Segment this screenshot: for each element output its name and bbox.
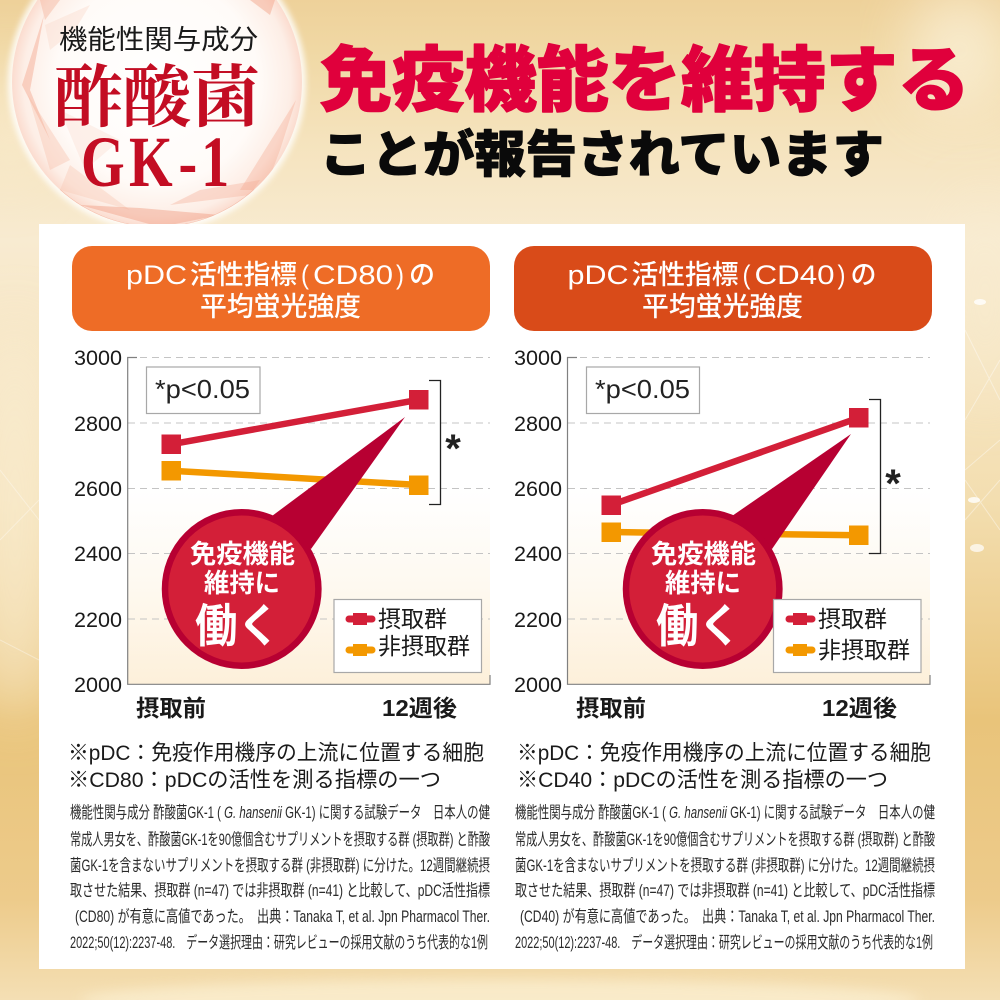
callout bubble: 維持に [665,568,741,598]
callout bubble: 免疫機能 [190,539,295,569]
header: CD40: pDC [568,260,628,290]
text: GK-1: GK-1 [81,121,229,202]
significance bracket: * [885,462,901,506]
panel: left CD80 [68,246,490,952]
legend: 摂取群 [818,606,887,632]
chart: CD80 line chart [74,347,490,721]
series: intake [162,390,428,454]
chart: CD80 line chart: 2600 [74,478,122,501]
chart: CD40 line chart: 2800 [514,413,562,436]
footnote: study details: 機能性関与成分 酢酸菌GK-1 ( G. hansenii GK-1) に関する試験データ 日本人の健 [70,802,490,822]
chart: CD40 line chart: 摂取前 [576,695,646,721]
notes: definitions: ※CD80：pDCの活性を測る指標の一つ [68,768,441,792]
header: CD80: CD80 [313,260,393,290]
header: CD80: ) [396,260,404,290]
header: CD40: 平均蛍光強度 [642,292,803,322]
significance bracket [869,400,901,554]
header: CD80: 平均蛍光強度 [200,292,361,322]
chart: CD80 line chart: 2000 [74,674,122,697]
icon: crystal globe [8,0,306,231]
callout bubble: 働く [195,600,280,652]
callout bubble: 維持に [204,568,280,598]
series: non-intake [602,522,868,545]
p-value box [586,367,700,414]
footnote: study details: 常成人男女を、酢酸菌GK-1を90億個含むサプリメントを摂取する群 (摂取群) と酢酸 [70,830,490,849]
callout bubble: 免疫機能 [651,539,756,569]
callout bubble [165,417,405,666]
chart: CD40 line chart: 2200 [514,609,562,632]
callout bubble: 働く [656,600,741,652]
legend: 非摂取群 [818,637,910,663]
legend [774,600,921,672]
header: CD40: 活性指標 [632,260,738,290]
chart: CD80 line chart: 摂取前 [136,695,206,721]
footnote: study details [70,802,490,952]
chart: CD40 line chart: 2600 [514,478,562,501]
footnote: study details: 2022;50(12):2237-48. データ選択理由：研究レビューの採用文献のうち代表的な1例 [70,932,488,952]
header: CD80 [72,246,490,331]
notes: definitions: ※pDC：免疫作用機序の上流に位置する細胞 [517,741,931,765]
footnote: study details: (CD80) が有意に高値であった。 出典：Tanaka T, et al. Jpn Pharmacol Ther. [75,907,490,926]
significance bracket [429,380,461,504]
significance bracket: * [445,427,461,471]
header: CD40: ( [742,260,750,290]
notes: definitions [68,741,484,792]
chart: CD40 line chart: 2400 [514,543,562,566]
chart: CD80 line chart: 3000 [74,347,122,370]
footnote: study details [515,802,935,952]
header: CD40: ) [838,260,846,290]
chart: CD80 line chart: 2200 [74,609,122,632]
series: intake [602,408,868,515]
header: CD40 [514,246,932,331]
header: CD40: CD40 [754,260,834,290]
chart: CD80 line chart: 2400 [74,543,122,566]
chart: CD40 line chart: 3000 [514,347,562,370]
header: CD80: ( [301,260,309,290]
chart: CD40 line chart: 2000 [514,674,562,697]
legend: 摂取群 [378,606,447,632]
panel: white content card [39,224,965,969]
p-value box: *p<0.05 [155,374,250,404]
chart: CD80 line chart: 12週後 [382,695,457,721]
panel: right CD40 [514,246,935,952]
callout bubble [626,434,851,666]
notes: definitions: ※pDC：免疫作用機序の上流に位置する細胞 [68,741,484,765]
text: 機能性関与成分: 機能性関与成分 [59,25,258,55]
chart: CD40 line chart [514,347,930,721]
series: non-intake [162,461,428,495]
title: 免疫機能を維持する: 免疫機能を維持する [320,42,970,121]
subtitle: ことが報告されています: ことが報告されています [320,127,884,183]
legend: 非摂取群 [378,633,470,659]
footnote: study details: 取させた結果、摂取群 (n=47) では非摂取群 (n=41) と比較して、pDC活性指標 [70,881,490,900]
footnote: study details: 菌GK-1を含まないサプリメントを摂取する群 (非摂取群) に分けた。12週間継続摂 [70,856,490,875]
text: 酢酸菌: 酢酸菌 [54,44,260,141]
header: CD80: 活性指標 [190,260,297,290]
header: CD80: pDC [126,260,187,290]
p-value box: *p<0.05 [595,374,690,404]
notes: definitions [517,741,931,792]
p-value box [146,367,260,414]
legend [334,600,482,672]
chart: CD40 line chart: 12週後 [822,695,897,721]
header: CD80: の [409,260,435,290]
notes: definitions: ※CD40：pDCの活性を測る指標の一つ [517,768,888,792]
chart: CD80 line chart: 2800 [74,413,122,436]
header: CD40: の [850,260,876,290]
